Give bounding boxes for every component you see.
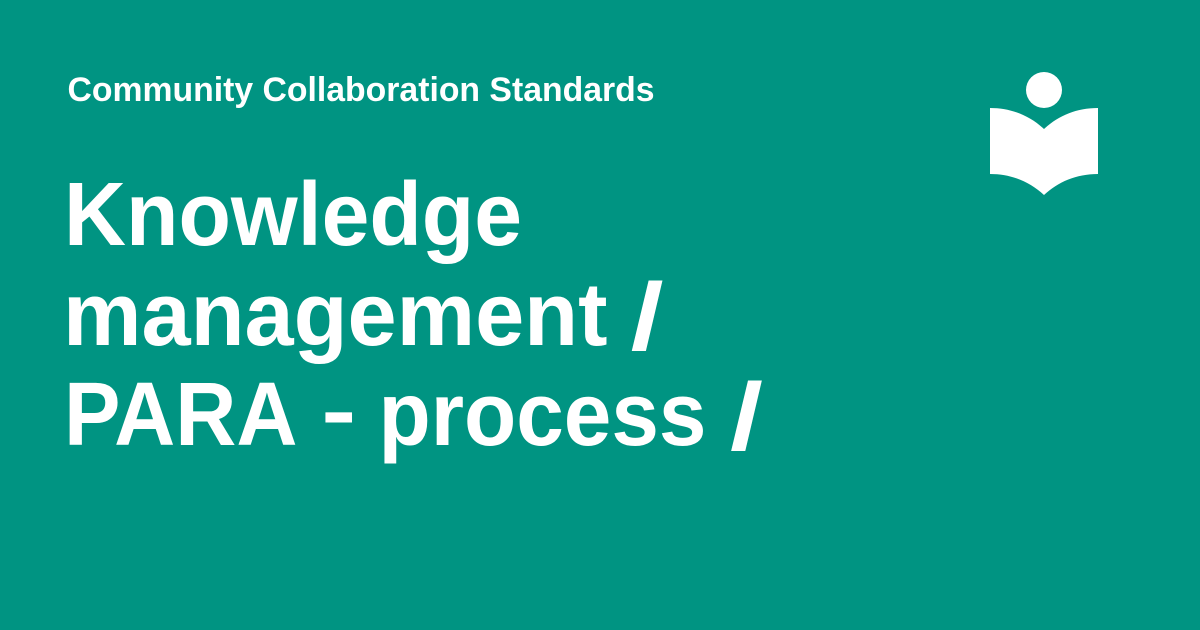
page title: management xyxy=(63,265,608,365)
page title: - xyxy=(321,363,356,458)
page title: PARA xyxy=(64,365,298,465)
page title: process xyxy=(378,365,706,465)
page title: / xyxy=(730,364,763,470)
site name heading: Community Collaboration Standards xyxy=(68,71,654,109)
page title: / xyxy=(631,264,664,370)
page title: Knowledge xyxy=(64,165,522,265)
icon: person reading open book logo xyxy=(990,72,1098,195)
page title xyxy=(63,165,763,470)
